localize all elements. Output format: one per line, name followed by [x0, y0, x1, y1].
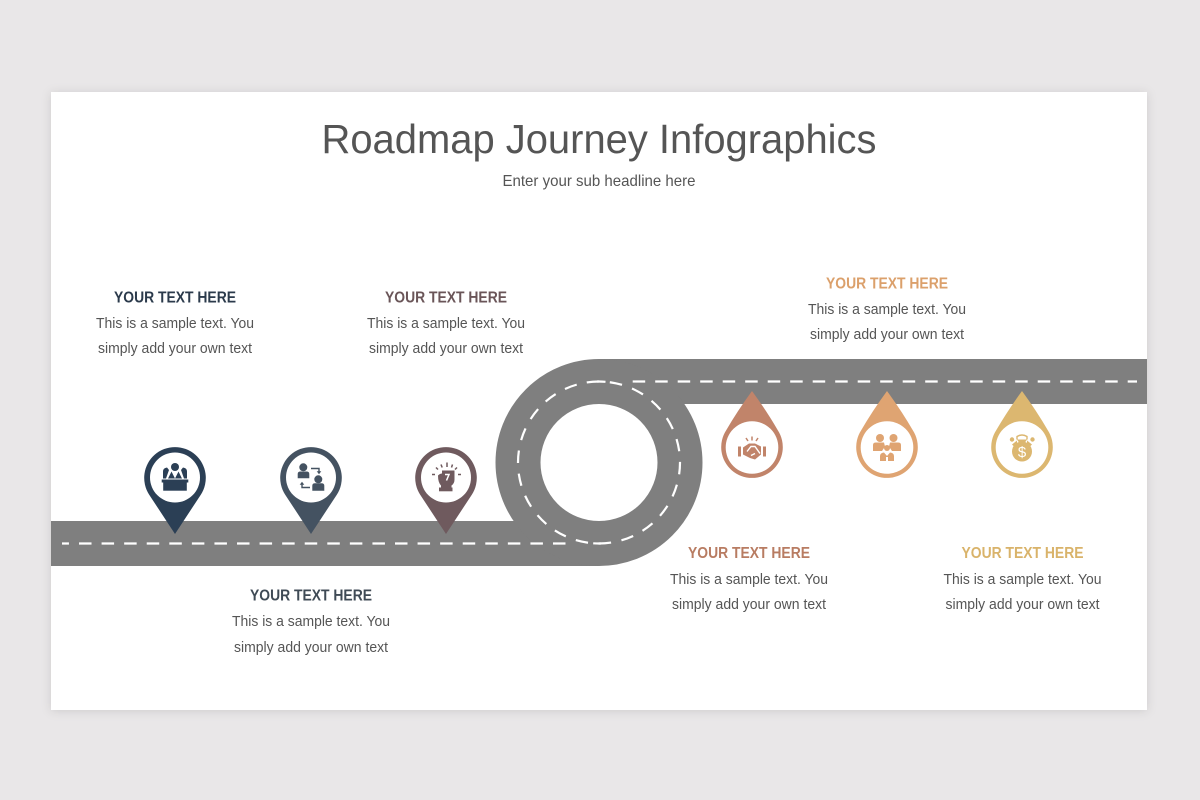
- pin 2: slate with exchange icon: [280, 447, 342, 534]
- background panel: [51, 92, 1147, 710]
- icon: speaker at podium: [162, 463, 188, 491]
- text block 5: This is a sample text. You: [808, 302, 966, 318]
- icon: team of three: [873, 434, 901, 461]
- text block 5: [808, 276, 966, 343]
- icon: raised fist: [432, 462, 461, 491]
- pin 5: peach with team icon: [856, 391, 918, 478]
- text block 1: simply add your own text: [98, 341, 252, 357]
- text block 6: YOUR TEXT HERE: [962, 545, 1084, 562]
- text block 3: [367, 290, 525, 357]
- pin 6: gold with money bag icon: [991, 391, 1053, 478]
- text block 4: [670, 545, 828, 613]
- text block 6: [944, 545, 1102, 613]
- icon: money bag: $: [1018, 444, 1027, 461]
- text block 2: YOUR TEXT HERE: [250, 588, 372, 604]
- text block 4: YOUR TEXT HERE: [688, 545, 810, 562]
- text block 4: simply add your own text: [672, 597, 826, 613]
- text block 6: simply add your own text: [946, 597, 1100, 613]
- text block 1: YOUR TEXT HERE: [114, 290, 236, 306]
- text block 2: [232, 588, 390, 656]
- pin 4: terracotta with handshake icon: [721, 391, 783, 478]
- text block 1: This is a sample text. You: [96, 316, 254, 332]
- subtitle: Enter your sub headline here: [502, 173, 696, 190]
- title: Roadmap Journey Infographics: [322, 116, 876, 162]
- text block 3: simply add your own text: [369, 341, 523, 357]
- text block 3: This is a sample text. You: [367, 316, 525, 332]
- text block 4: This is a sample text. You: [670, 572, 828, 588]
- icon: people exchange: [298, 463, 324, 491]
- road with loop: [51, 359, 1147, 566]
- text block 2: This is a sample text. You: [232, 614, 390, 630]
- text block 3: YOUR TEXT HERE: [385, 290, 507, 306]
- icon: handshake: [738, 436, 766, 460]
- pin 3: mauve with fist icon: [415, 447, 477, 534]
- text block 6: This is a sample text. You: [944, 572, 1102, 588]
- text block 1: [96, 290, 254, 357]
- text block 5: simply add your own text: [810, 327, 964, 343]
- text block 5: YOUR TEXT HERE: [826, 276, 948, 292]
- text block 2: simply add your own text: [234, 640, 388, 656]
- pin 1: navy with podium icon: [144, 447, 206, 534]
